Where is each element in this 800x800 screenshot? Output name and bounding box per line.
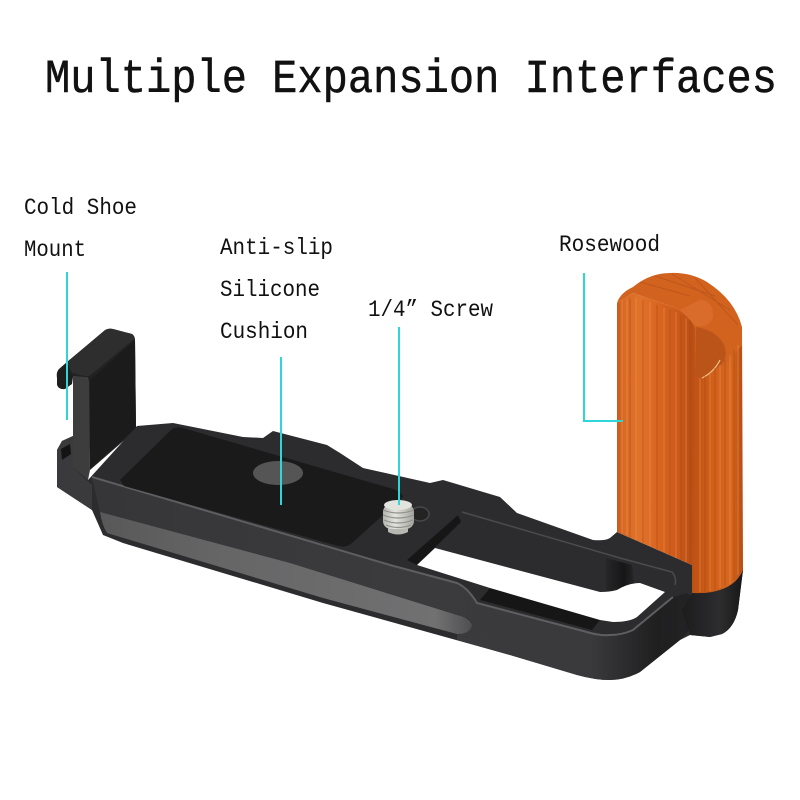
rosewood grip [617, 273, 743, 593]
leader: screw [398, 327, 400, 505]
upright cold shoe mount [67, 329, 136, 480]
label: cold shoe mount: Cold Shoe [24, 195, 137, 221]
label: cold shoe mount: Mount [24, 237, 86, 263]
left end block [57, 436, 92, 510]
leader: cold shoe mount [66, 272, 68, 420]
label: anti-slip silicone cushion: Silicone [220, 277, 320, 303]
leader: cushion [280, 357, 282, 505]
label: cold shoe mount [24, 195, 137, 263]
cushion hole [253, 461, 303, 485]
label: screw: 1/4” Screw [368, 297, 493, 323]
leader: rosewood [584, 273, 623, 421]
hook of cold shoe [57, 362, 74, 389]
1/4 inch screw [383, 500, 414, 534]
black grip bottom [682, 565, 743, 637]
wood front face [617, 293, 693, 593]
product: camera L-bracket [57, 329, 743, 680]
wood grain [622, 274, 738, 592]
label: anti-slip silicone cushion: Cushion [220, 319, 308, 345]
lower cutout strip [480, 588, 600, 630]
label: anti-slip silicone cushion [220, 235, 333, 345]
white window [417, 548, 665, 622]
label: rosewood: Rosewood [559, 232, 660, 258]
silicone cushion [120, 427, 403, 547]
front rail [92, 478, 695, 680]
upper dark edge [462, 512, 676, 585]
lower grey band [100, 512, 472, 634]
wood top cap [617, 273, 742, 378]
recess shading [606, 558, 634, 592]
ridge highlight line [92, 477, 673, 635]
label: anti-slip silicone cushion: Anti-slip [220, 235, 333, 261]
base plate silhouette [57, 423, 743, 680]
screw hole [411, 507, 429, 521]
wood side face [692, 323, 743, 593]
recess inner wall [407, 515, 461, 565]
